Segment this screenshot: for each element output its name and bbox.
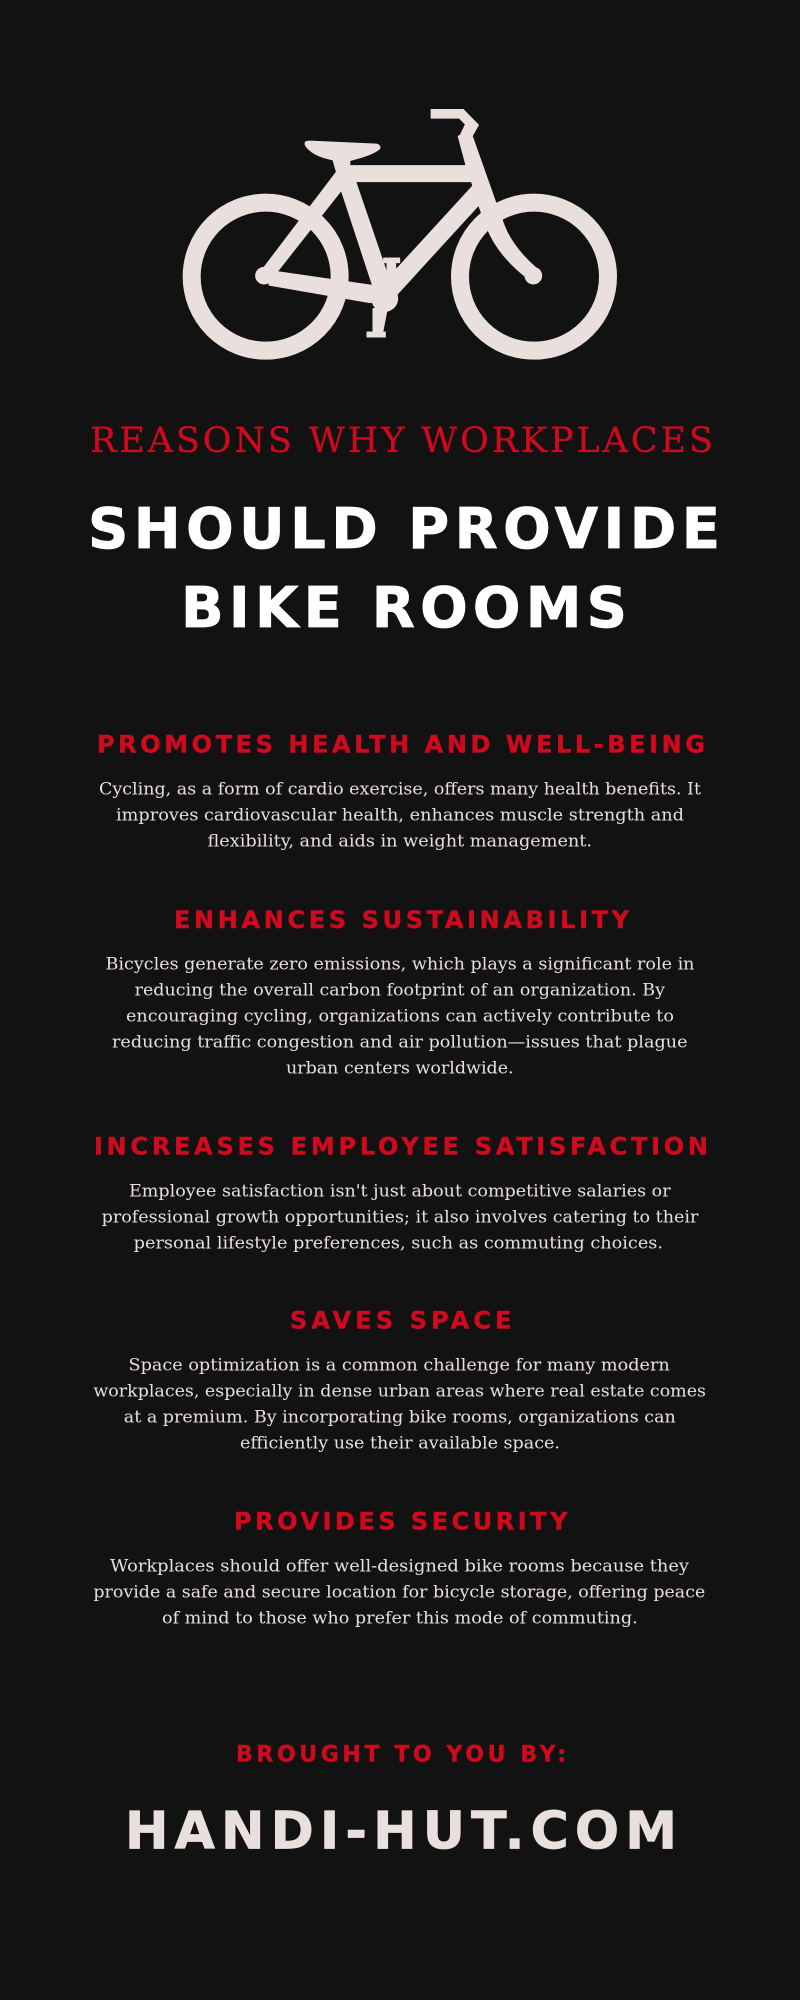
text block: Cycling, as a form of cardio exercise, offers many health benefits. It: [99, 780, 701, 800]
text block: [99, 780, 701, 852]
text block: flexibility, and aids in weight management.: [208, 832, 592, 852]
section: enhances sustainability: [106, 906, 695, 1078]
heading: INCREASES EMPLOYEE SATISFACTION: [94, 1132, 708, 1160]
text block: at a premium. By incorporating bike rooms, organizations can: [124, 1408, 676, 1428]
text block: Workplaces should offer well-designed bike rooms because they: [110, 1556, 689, 1576]
brought to you by: BROUGHT TO YOU BY:: [236, 1743, 566, 1768]
section: increases employee satisfaction: [94, 1132, 708, 1254]
section: saves space: [93, 1306, 706, 1454]
text block: urban centers worldwide.: [286, 1058, 514, 1078]
heading: PROVIDES SECURITY: [234, 1508, 568, 1536]
text block: improves cardiovascular health, enhances muscle strength and: [116, 806, 684, 826]
title line: should provide: SHOULD PROVIDE: [88, 497, 720, 562]
title line: bike rooms: BIKE ROOMS: [181, 576, 627, 641]
title: [88, 421, 720, 641]
text block: [93, 1556, 705, 1628]
section: promotes health and well-being: [97, 730, 705, 852]
text block: provide a safe and secure location for bicycle storage, offering peace: [93, 1582, 705, 1602]
text block: professional growth opportunities; it also involves catering to their: [102, 1208, 699, 1228]
text block: [106, 954, 695, 1078]
text block: [93, 1356, 706, 1454]
text block: Employee satisfaction isn't just about competitive salaries or: [129, 1182, 671, 1202]
text block: Space optimization is a common challenge for many modern: [128, 1356, 670, 1376]
text block: [102, 1182, 699, 1254]
text block: reducing the overall carbon footprint of an organization. By: [135, 980, 665, 1000]
footer: [125, 1743, 677, 1862]
text block: encouraging cycling, organizations can actively contribute to: [126, 1006, 674, 1026]
website: HANDI-HUT.COM: [125, 1802, 677, 1862]
title line: reasons why workplaces: REASONS WHY WORKPLACES: [90, 421, 713, 461]
heading: PROMOTES HEALTH AND WELL-BEING: [97, 730, 705, 758]
section: provides security: [93, 1508, 705, 1628]
text block: efficiently use their available space.: [240, 1434, 560, 1454]
heading: ENHANCES SUSTAINABILITY: [174, 906, 630, 934]
icon: bicycle: [192, 109, 608, 351]
text block: of mind to those who prefer this mode of commuting.: [162, 1608, 638, 1628]
heading: SAVES SPACE: [290, 1306, 512, 1334]
text block: personal lifestyle preferences, such as commuting choices.: [134, 1234, 663, 1254]
text block: workplaces, especially in dense urban areas where real estate comes: [93, 1382, 706, 1402]
text block: reducing traffic congestion and air pollution—issues that plague: [112, 1032, 688, 1052]
text block: Bicycles generate zero emissions, which plays a significant role in: [106, 954, 695, 974]
